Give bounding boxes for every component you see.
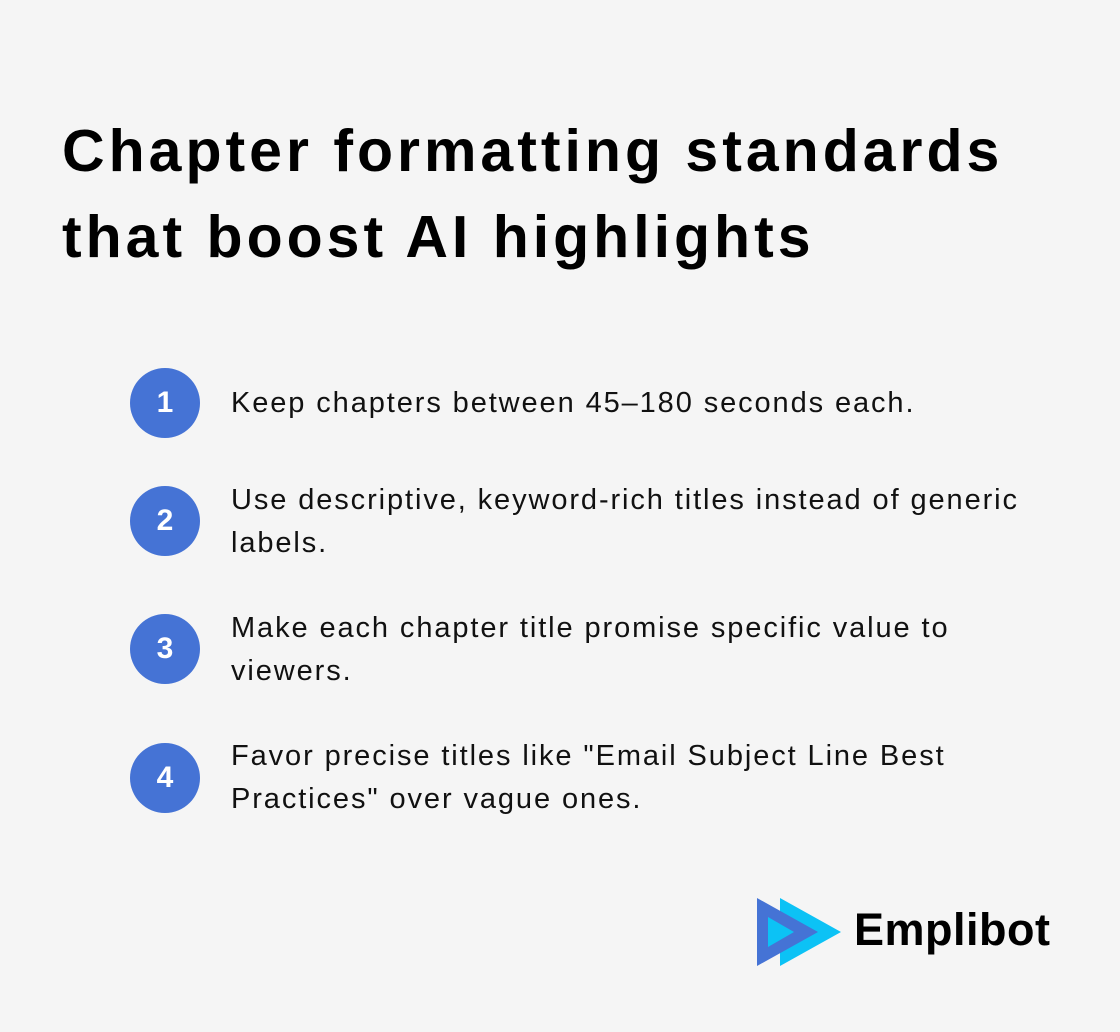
item 3: 3 <box>157 632 173 665</box>
item 3: Make each chapter title promise specific value to <box>231 612 950 644</box>
logo text: Emplibot <box>854 904 1050 955</box>
item 2: Use descriptive, keyword-rich titles instead of generic <box>231 484 1019 516</box>
item 4: 4 <box>157 761 173 794</box>
item 4 <box>130 740 946 815</box>
item 3 <box>130 612 950 687</box>
item 2: 2 <box>157 504 173 537</box>
title: that boost AI highlights <box>62 204 815 270</box>
item 1: 1 <box>157 386 173 419</box>
item 1: Keep chapters between 45–180 seconds each. <box>231 387 915 419</box>
item 1 <box>130 368 915 438</box>
title <box>62 118 1003 270</box>
title: Chapter formatting standards <box>62 118 1003 184</box>
item 2 <box>130 484 1019 559</box>
item 4: Practices" over vague ones. <box>231 783 642 815</box>
icon: play triangles <box>757 898 841 966</box>
item 4: Favor precise titles like "Email Subject Line Best <box>231 740 946 772</box>
item 3: viewers. <box>231 655 353 687</box>
item 2: labels. <box>231 527 328 559</box>
logo <box>757 898 1050 966</box>
